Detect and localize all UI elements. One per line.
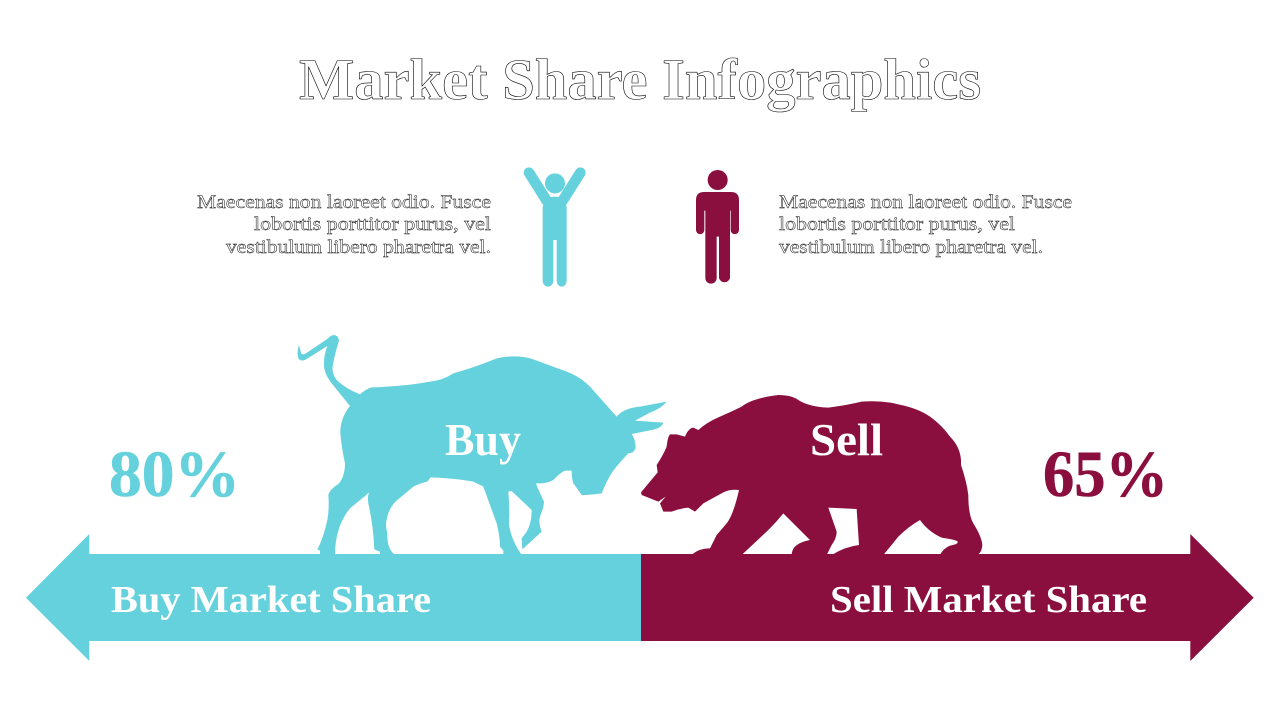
text block: sell description: Maecenas non laoreet odio. Fusce [779,192,1072,213]
text block: sell description [779,192,1072,258]
bear silhouette [641,395,982,555]
arrow label: buy market share: Buy Market Share [111,579,431,621]
text block: buy description: vestibulum libero pharetra vel. [226,237,491,258]
stat: sell percent: 65% [1043,438,1168,511]
text block: buy description [197,192,491,258]
bull silhouette [298,335,667,555]
text block: sell description: lobortis porttitor purus, vel [779,214,1015,235]
text block: sell description: vestibulum libero pharetra vel. [779,237,1043,258]
arrow label: sell market share: Sell Market Share [830,579,1147,621]
icon: standing person [696,170,739,284]
label: sell: Sell [810,415,883,465]
arrow: buy market share [26,534,641,661]
text block: buy description: Maecenas non laoreet odio. Fusce [197,192,491,213]
label: buy: Buy [445,415,521,465]
stat: buy percent: 80% [109,438,240,511]
arrow: sell market share [641,534,1254,661]
icon: person with raised arms [529,173,580,287]
title: Market Share Infographics [299,47,981,112]
text block: buy description: lobortis porttitor purus, vel [254,214,491,235]
